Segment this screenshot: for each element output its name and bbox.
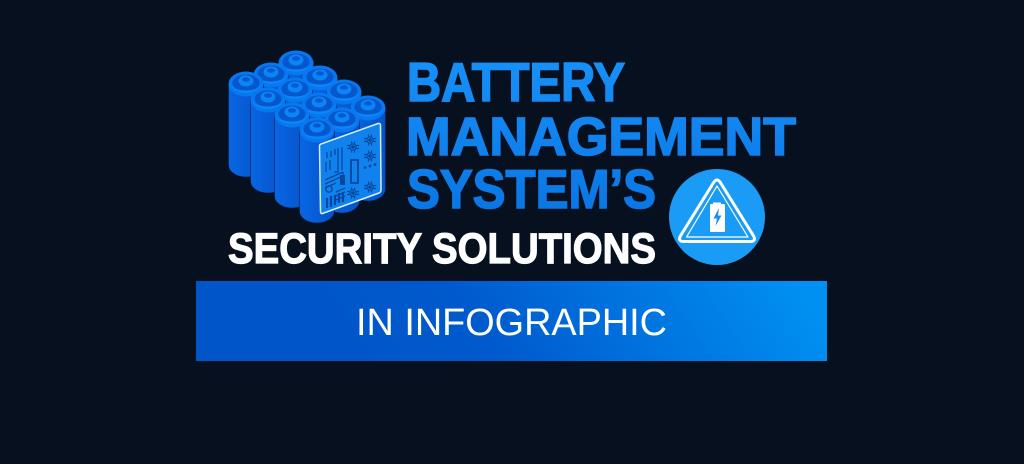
banner: in infographic bbox=[196, 281, 827, 361]
circuit board panel bbox=[320, 123, 381, 214]
icon: battery warning badge bbox=[669, 169, 765, 265]
title: blue heading: BATTERY bbox=[407, 51, 625, 113]
banner: in infographic: IN INFOGRAPHIC bbox=[356, 302, 667, 344]
icon: battery pack with circuit board bbox=[228, 50, 386, 223]
subtitle: security solutions: SECURITY SOLUTIONS bbox=[228, 225, 656, 273]
title: blue heading: SYSTEM’S bbox=[407, 158, 656, 220]
title: blue heading bbox=[406, 51, 796, 220]
title: blue heading: MANAGEMENT bbox=[406, 107, 796, 167]
